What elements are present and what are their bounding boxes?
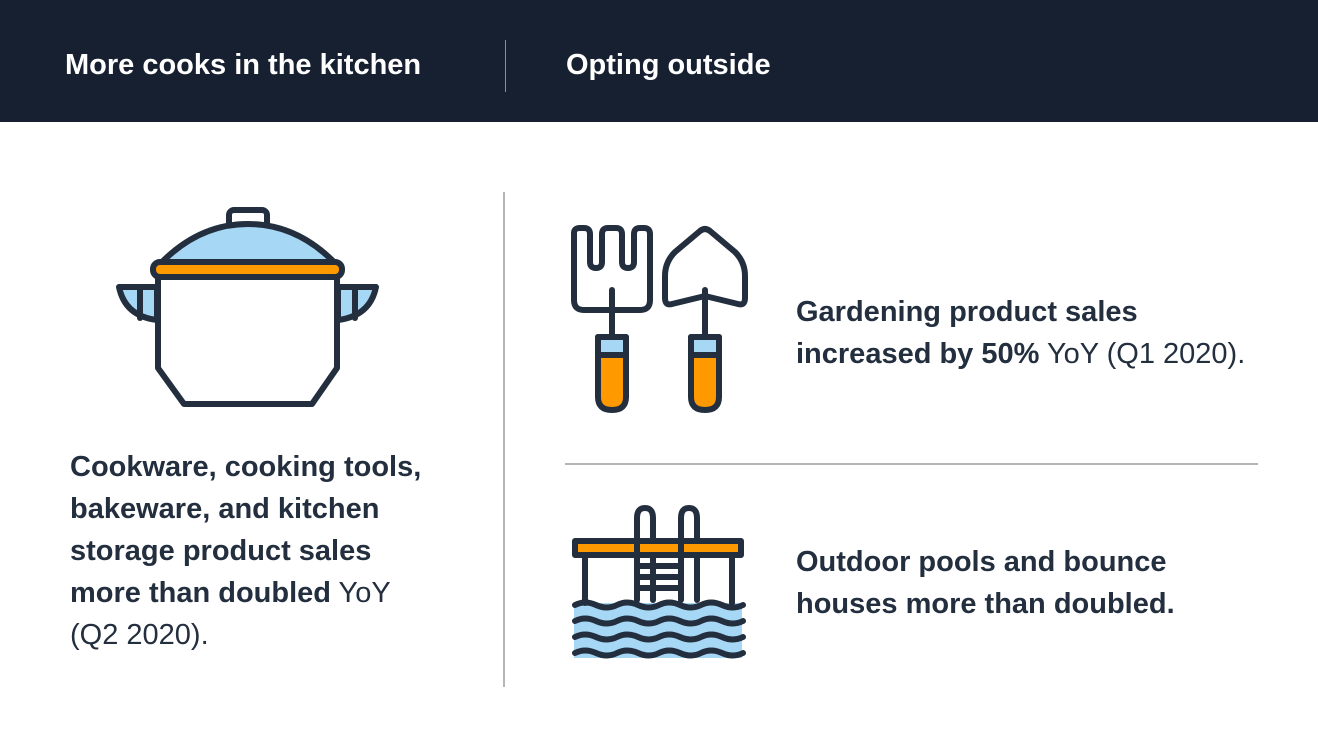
text: kitchen stat: Cookware, cooking tools, (70, 451, 421, 483)
text: gardening stat (796, 296, 1245, 370)
icon: cooking pot (119, 210, 376, 404)
text: gardening stat: Gardening product sales (796, 296, 1138, 328)
icon: trowel (665, 229, 745, 410)
icon: pool (574, 508, 743, 658)
text: kitchen stat: storage product sales (70, 535, 371, 567)
text: kitchen stat: more than doubled YoY (70, 577, 391, 609)
text: pools stat: Outdoor pools and bounce (796, 546, 1167, 578)
heading: more cooks: More cooks in the kitchen (65, 49, 421, 81)
text: kitchen stat: bakeware, and kitchen (70, 493, 379, 525)
text: gardening stat: increased by 50% YoY (Q1 2020). (796, 338, 1245, 370)
icon: garden fork (574, 228, 650, 410)
text: kitchen stat: (Q2 2020). (70, 619, 209, 651)
header bar (0, 0, 1318, 122)
heading: opting outside: Opting outside (566, 49, 771, 81)
text: pools stat (796, 546, 1175, 620)
text: kitchen stat (70, 451, 421, 651)
text: pools stat: houses more than doubled. (796, 588, 1175, 620)
